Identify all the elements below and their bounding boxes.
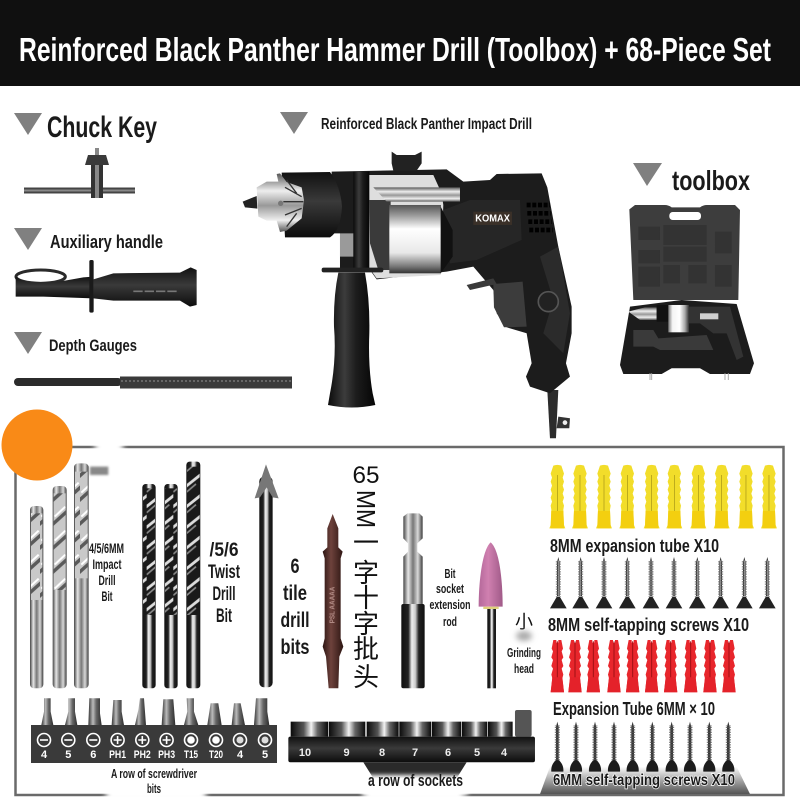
toolbox: latches — [650, 373, 728, 380]
drill: grip highlight — [540, 247, 570, 353]
label: impact drill bit: 4/5/6MM — [89, 541, 124, 556]
marker triangle — [14, 228, 42, 250]
label: row of sockets: a row of sockets — [368, 772, 463, 790]
impact drill bits — [30, 463, 108, 688]
drill: brand plate: KOMAX — [475, 214, 511, 225]
label: 65MM slotted and cross bit — [351, 462, 381, 692]
group: 8mm screws — [548, 557, 776, 635]
double-ended screwdriver bit: PSL AAAAA — [328, 586, 337, 623]
label: bit socket extension rod: socket — [436, 581, 464, 596]
bit tips — [41, 698, 269, 725]
illustration: hammer drill — [243, 152, 572, 438]
group: twist drill bits — [142, 462, 240, 688]
label: impact drill bit: Drill — [98, 573, 116, 588]
drill: lower collar plate — [340, 233, 355, 257]
drill: side clamp — [353, 172, 369, 268]
marker triangle — [14, 113, 42, 135]
group: impact drill bits — [30, 463, 124, 688]
drill: gear housing — [368, 175, 443, 278]
bit size labels: T15 — [184, 749, 198, 761]
bit size labels: PH2 — [134, 749, 151, 761]
label: twist drill bit: Drill — [212, 584, 236, 605]
drill: vents — [527, 205, 553, 230]
socket size labels: 7 — [412, 747, 418, 759]
icon: chuck key — [24, 148, 135, 198]
panel: accessories frame — [16, 438, 784, 800]
group: 6mm screws — [540, 722, 750, 794]
drill: trigger — [467, 278, 497, 290]
label: tile drill bits: tile — [283, 582, 307, 605]
illustration: open toolbox — [620, 205, 754, 380]
label: bit socket extension rod: Bit — [444, 566, 456, 581]
yellow expansion tubes — [549, 465, 777, 528]
label: tile drill bits: drill — [280, 609, 310, 632]
drill: rear housing highlight — [443, 200, 522, 263]
group: screwdriver bits — [31, 698, 277, 796]
label: bit socket extension rod — [430, 566, 471, 629]
bit size labels: 5 — [262, 749, 268, 761]
marker triangle — [633, 163, 662, 186]
group: sockets — [288, 710, 535, 795]
label: row of screwdriver bits — [111, 766, 197, 796]
section: chuck key — [14, 111, 157, 198]
socket extension rod — [401, 513, 425, 688]
group: double-ended bit — [323, 462, 381, 692]
drill: chrome motor band — [389, 205, 441, 273]
icon: depth gauge rod — [14, 376, 292, 388]
label: twist drill bit: /5/6 — [210, 540, 238, 561]
bit size labels: 4 — [237, 749, 244, 761]
bit size labels: 5 — [65, 749, 71, 761]
twist drill bits — [142, 462, 200, 688]
socket size labels: 4 — [501, 747, 508, 759]
drill: top knob — [392, 152, 422, 171]
erased frame patches — [95, 438, 463, 800]
black self-tapping screws 8mm — [550, 557, 776, 608]
label: twist drill bit: Bit — [216, 606, 232, 627]
heading: toolbox: toolbox — [672, 165, 750, 196]
label: tile drill bits — [280, 555, 310, 659]
group: 8mm expansion tubes — [549, 465, 777, 556]
drill: dark recess behind motor — [369, 200, 391, 270]
group: tile drill bits — [255, 464, 310, 687]
heading: auxiliary handle: Auxiliary handle — [50, 232, 163, 252]
grinding head — [479, 542, 503, 688]
drill: motor ribs — [441, 207, 453, 273]
toolbox: base — [620, 300, 754, 374]
bit size labels: PH1 — [109, 749, 126, 761]
label: tile drill bits: 6 — [290, 555, 300, 578]
drill: main body — [330, 169, 572, 393]
bit size labels: PH3 — [158, 749, 175, 761]
label: 8mm screws: 8MM self-tapping screws X10 — [548, 614, 749, 635]
socket size labels: 10 — [299, 747, 311, 759]
marker triangle — [14, 332, 42, 354]
label: tile drill bits: bits — [280, 636, 310, 659]
socket size labels: 6 — [445, 747, 451, 759]
section: depth gauges — [14, 332, 292, 388]
drill: chuck collar — [282, 172, 342, 237]
section: toolbox — [620, 163, 754, 380]
black self-tapping screws 6mm — [540, 722, 750, 794]
socket size labels — [299, 747, 508, 759]
drill: top chrome strip — [373, 187, 460, 202]
drill: side handle — [328, 273, 375, 407]
label: row of screwdriver bits: A row of screwdriver — [111, 766, 197, 781]
heading: chuck key: Chuck Key — [47, 111, 157, 144]
label: grinding head: Grinding — [507, 645, 541, 660]
title bar — [0, 0, 800, 86]
heading: impact drill: Reinforced Black Panther Impact Drill — [321, 116, 532, 133]
label: 8mm expansion tube: 8MM expansion tube X10 — [550, 535, 719, 556]
label: twist drill bit: Twist — [208, 562, 240, 583]
label: bit socket extension rod: rod — [443, 614, 457, 629]
drill: speed knob — [538, 292, 558, 312]
bit size labels: 4 — [41, 749, 48, 761]
drill: switch block — [493, 282, 527, 327]
section: auxiliary handle — [14, 228, 197, 313]
label: 65MM slotted and cross bit: 一字十字批头 — [353, 528, 379, 692]
label: 6mm screws: 6MM self-tapping screws X10 — [553, 772, 735, 789]
smudged character — [515, 612, 533, 641]
socket row — [288, 710, 535, 795]
socket size labels: 8 — [379, 747, 385, 759]
label: 6mm expansion tube: Expansion Tube 6MM × 10 — [553, 698, 715, 719]
heading: depth gauges: Depth Gauges — [49, 337, 137, 355]
bit holder strip — [31, 725, 277, 763]
bit size labels — [41, 749, 268, 761]
label: row of screwdriver bits: bits — [147, 781, 161, 796]
label: grinding head: head — [514, 661, 534, 676]
bit size labels: T20 — [209, 749, 223, 761]
label: twist drill bit — [208, 540, 240, 627]
label: impact drill bit: Bit — [102, 589, 113, 604]
drill: power cord — [547, 390, 570, 438]
label: 65MM slotted and cross bit: 65 — [352, 462, 380, 489]
double-ended screwdriver bit — [323, 514, 343, 688]
label: 65MM slotted and cross bit: MM — [351, 490, 381, 528]
label: impact drill bit: Impact — [92, 557, 122, 572]
red expansion tubes — [551, 640, 736, 692]
icon: auxiliary handle — [16, 260, 197, 313]
label: bit socket extension rod: extension — [430, 597, 471, 612]
smudged character: 小 — [515, 612, 533, 632]
label: grinding head — [507, 645, 541, 676]
icon: orange circle badge — [2, 410, 72, 480]
group: bit socket extension rod — [401, 513, 471, 688]
socket size labels: 5 — [474, 747, 480, 759]
group: 6mm expansion tubes — [551, 640, 736, 719]
section: impact drill — [243, 112, 572, 438]
marker triangle — [280, 112, 308, 134]
bit size labels: 6 — [90, 749, 96, 761]
bit symbols — [38, 734, 272, 746]
drill: handle flange — [322, 268, 383, 272]
tile drill bit — [255, 464, 279, 687]
socket size labels: 9 — [343, 747, 350, 759]
drill: chuck — [243, 173, 304, 232]
toolbox: lid — [629, 205, 740, 300]
toolbox: stored drill — [628, 305, 743, 360]
toolbox: stored handle — [633, 330, 713, 350]
label: impact drill bit — [89, 541, 124, 604]
group: grinding head — [479, 542, 541, 688]
